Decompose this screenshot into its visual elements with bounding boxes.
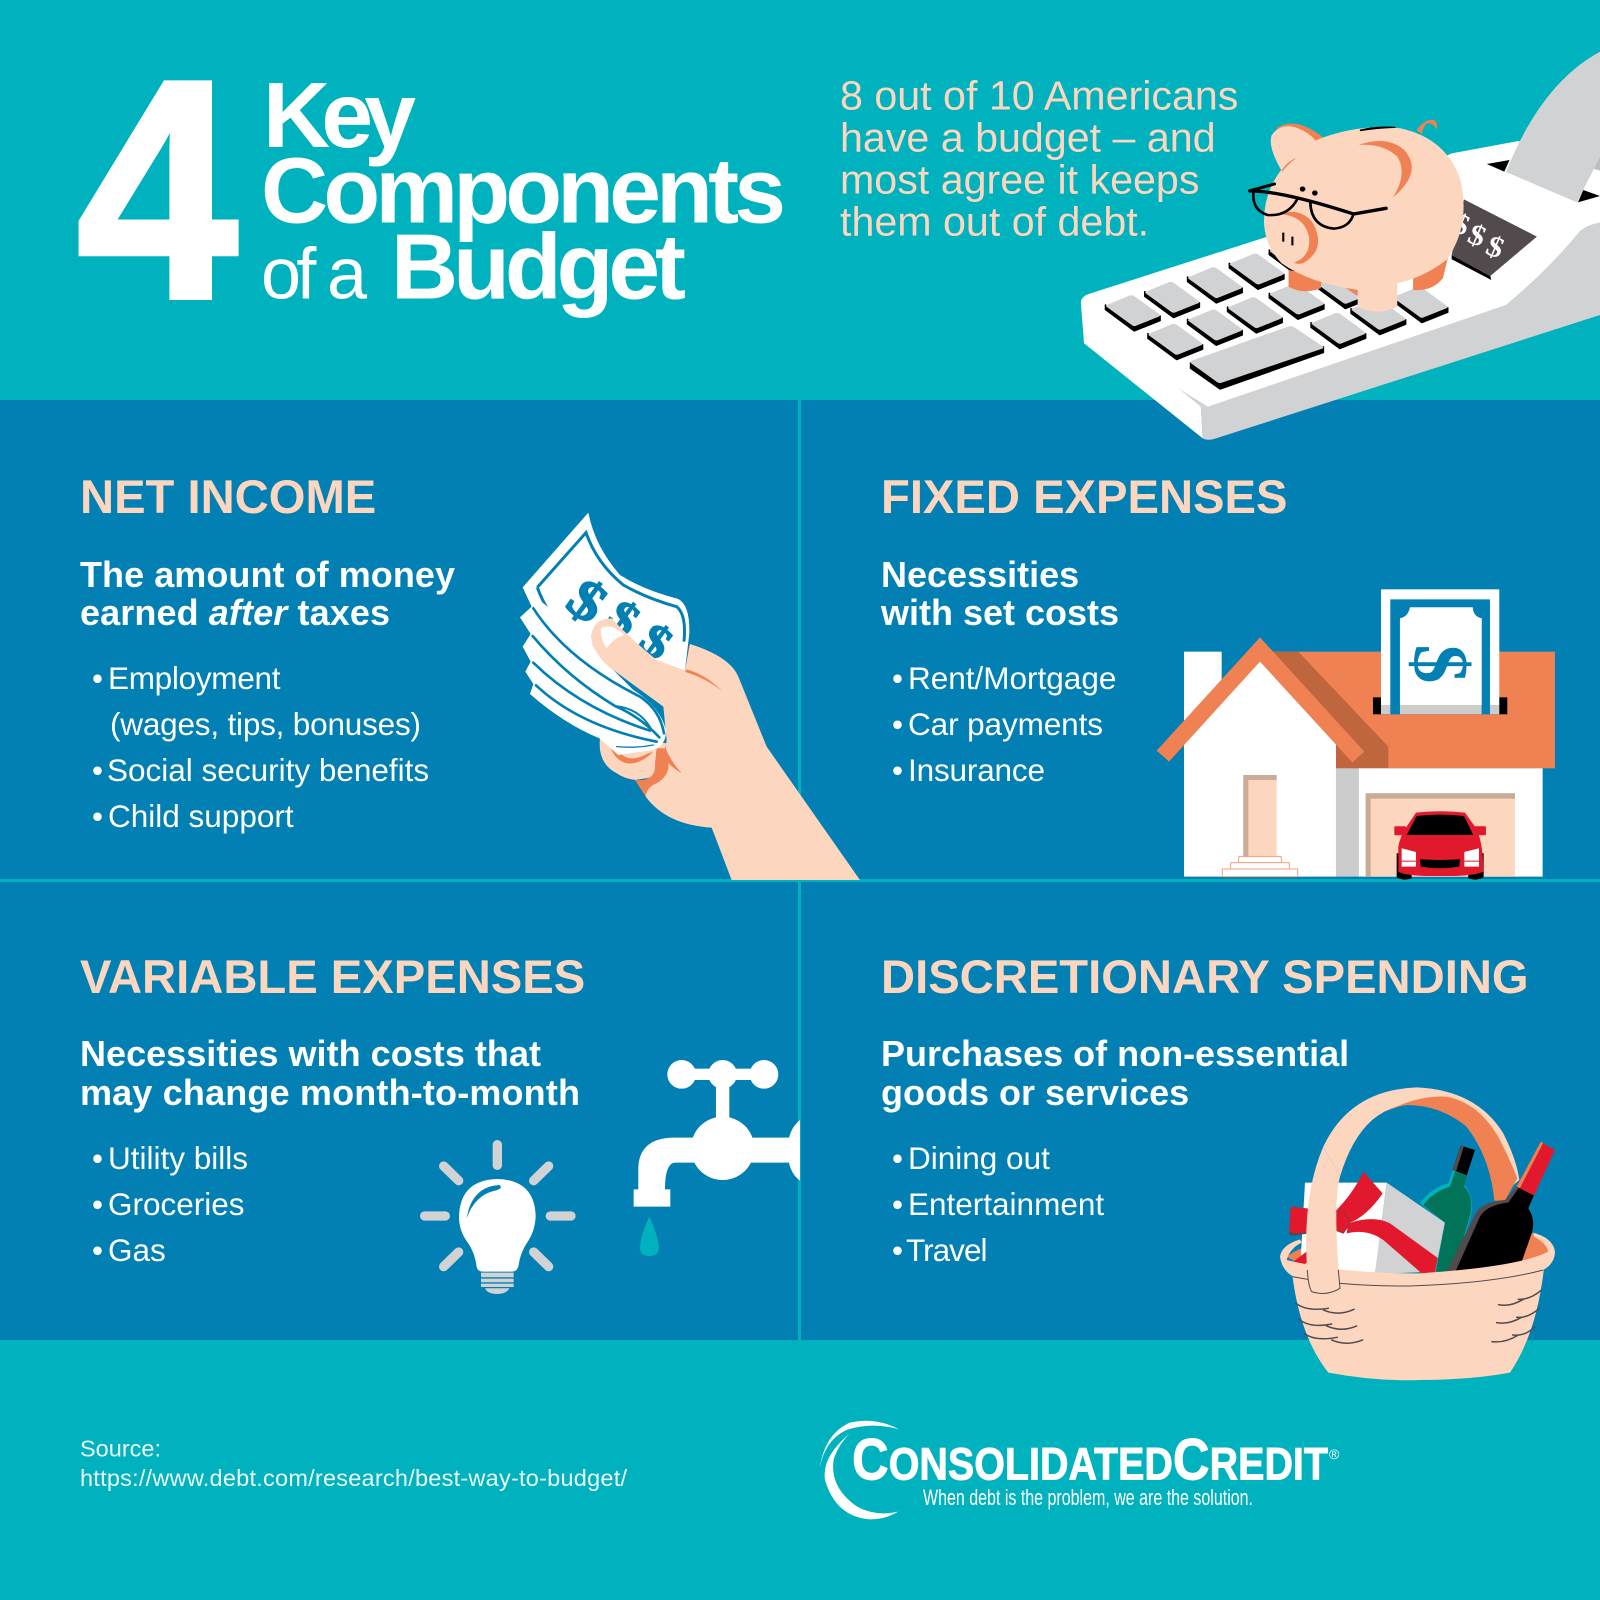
calculator display	[1447, 199, 1537, 280]
description: fixed expenses: Necessities	[881, 554, 1079, 595]
panel: net income	[0, 400, 798, 879]
illustration: calculator with piggy bank	[1081, 52, 1600, 440]
dollar bill in roof slot	[1373, 589, 1507, 714]
illustration: hand holding money	[520, 513, 860, 880]
calculator display: $	[1447, 206, 1475, 242]
intro statement	[840, 72, 1238, 244]
description: variable expenses: Necessities with costs that	[80, 1033, 541, 1074]
list: net income items	[92, 660, 429, 834]
list: fixed expense items: Car payments	[908, 706, 1103, 742]
intro statement: most agree it keeps	[840, 156, 1199, 202]
source note: Source:	[80, 1436, 161, 1462]
description: fixed expenses	[880, 554, 1119, 633]
list: discretionary items: Dining out	[908, 1140, 1050, 1176]
list: net income items: (wages, tips, bonuses)	[110, 706, 421, 742]
list: fixed expense items	[892, 660, 1116, 788]
red car	[1394, 811, 1486, 880]
title: Key	[263, 63, 416, 167]
top banknote: $	[556, 567, 618, 636]
illustration: light bulb	[425, 1145, 571, 1294]
green bottle	[1420, 1145, 1475, 1273]
list: net income items: Social security benefits	[107, 752, 429, 788]
top banknote: $	[630, 612, 682, 670]
list: fixed expense items: Rent/Mortgage	[908, 660, 1116, 696]
calculator display: $	[1463, 217, 1491, 253]
description: variable expenses	[80, 1033, 580, 1113]
list: fixed expense items: •	[892, 706, 903, 742]
illustration: faucet with water drop	[634, 1060, 800, 1256]
list: discretionary items: •	[892, 1140, 903, 1176]
basket body	[1280, 1233, 1555, 1380]
water drop	[640, 1217, 659, 1256]
logo: Consolidated Credit: ®	[1329, 1446, 1340, 1462]
dollar bill in roof slot: $	[1398, 644, 1485, 684]
calculator display: $	[1481, 228, 1510, 265]
logo tagline: When debt is the problem, we are the solution.	[923, 1485, 1253, 1510]
panel: fixed expenses	[801, 400, 1600, 879]
list: variable expense items: Utility bills	[108, 1140, 248, 1176]
heading: discretionary spending: DISCRETIONARY SPENDING	[881, 951, 1529, 1004]
top banknote: $	[597, 589, 650, 647]
list: variable expense items	[92, 1140, 248, 1268]
list: fixed expense items: Insurance	[908, 752, 1045, 788]
gift box	[1289, 1172, 1445, 1274]
red wine bottle	[1446, 1142, 1555, 1273]
panel: variable expenses	[0, 882, 798, 1340]
list: discretionary items: Travel	[906, 1232, 988, 1268]
title: Components	[261, 138, 786, 242]
front door and steps	[1222, 775, 1298, 877]
list: net income items: Employment	[108, 660, 281, 696]
source note	[80, 1436, 627, 1491]
basket handle back	[1323, 1087, 1519, 1201]
list: fixed expense items: •	[892, 752, 903, 788]
list: discretionary items: •	[892, 1186, 903, 1222]
list: net income items: Child support	[108, 798, 294, 834]
source note: https://www.debt.com/research/best-way-to-budget/	[80, 1465, 627, 1491]
title: of a	[261, 234, 368, 314]
title: 4	[76, 15, 240, 364]
list: net income items: •	[92, 660, 103, 696]
description: discretionary spending: goods or services	[881, 1072, 1189, 1113]
list: net income items: •	[92, 798, 103, 834]
heading: fixed expenses: FIXED EXPENSES	[881, 471, 1287, 524]
list: variable expense items: •	[92, 1186, 103, 1222]
panel: discretionary spending	[801, 882, 1600, 1340]
description: net income: The amount of money	[80, 554, 455, 595]
logo wordmark: CONSOLIDATEDCREDIT	[852, 1428, 1328, 1492]
description: fixed expenses: with set costs	[880, 592, 1119, 633]
description: net income	[80, 554, 455, 633]
description: discretionary spending	[881, 1033, 1349, 1113]
glasses	[1250, 184, 1386, 229]
intro statement: 8 out of 10 Americans	[840, 72, 1238, 118]
calculator body	[1081, 52, 1600, 440]
hand	[591, 618, 860, 880]
illustration: house with car and dollar bill	[1157, 589, 1555, 880]
intro statement: have a budget – and	[840, 114, 1216, 160]
list: discretionary items	[892, 1140, 1104, 1268]
title	[76, 15, 786, 364]
illustration: gift basket	[1280, 1087, 1555, 1380]
description: net income: earned after taxes	[80, 592, 390, 633]
logo: Consolidated Credit	[820, 1421, 1340, 1519]
description: variable expenses: may change month-to-month	[80, 1072, 580, 1113]
intro statement: them out of debt.	[840, 198, 1149, 244]
banknote stack	[520, 587, 666, 755]
top banknote	[523, 513, 689, 671]
piggy bank	[1250, 120, 1464, 312]
title: Budget	[391, 214, 686, 318]
list: discretionary items: Entertainment	[908, 1186, 1104, 1222]
list: variable expense items: Gas	[108, 1232, 166, 1268]
garage door	[1366, 793, 1515, 877]
heading: net income: NET INCOME	[80, 471, 376, 524]
list: net income items: •	[92, 752, 103, 788]
list: variable expense items: •	[92, 1140, 103, 1176]
basket handle front	[1306, 1147, 1340, 1294]
list: variable expense items: Groceries	[108, 1186, 245, 1222]
logo swoosh	[820, 1421, 899, 1519]
description: discretionary spending: Purchases of non-essential	[881, 1033, 1349, 1074]
list: fixed expense items: •	[892, 660, 903, 696]
list: variable expense items: •	[92, 1232, 103, 1268]
calculator keys	[1105, 240, 1448, 389]
heading: variable expenses: VARIABLE EXPENSES	[80, 951, 585, 1004]
list: discretionary items: •	[892, 1232, 903, 1268]
